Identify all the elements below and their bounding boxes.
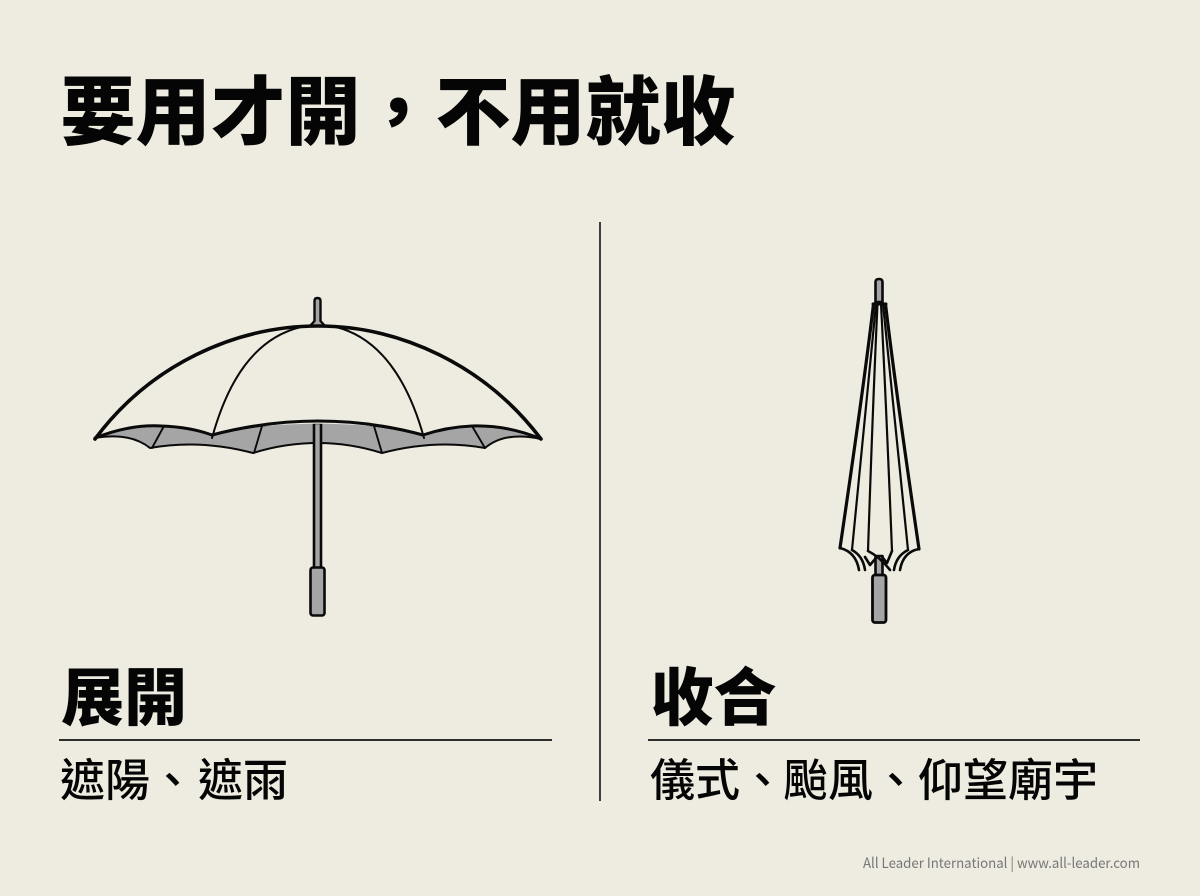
- handle: [310, 568, 324, 616]
- text: closed uses: 颱風、: [783, 755, 918, 806]
- icon: open umbrella: [95, 298, 541, 616]
- umbrella tip: [310, 298, 325, 326]
- heading: closed: 收合: [650, 664, 776, 734]
- umbrella underside: [95, 422, 541, 453]
- title: 要用才開，不用就收: [60, 70, 736, 154]
- icon: closed umbrella: [840, 279, 919, 622]
- outer folds: [840, 304, 919, 549]
- umbrella tip: [876, 279, 882, 302]
- heading: open: 展開: [61, 664, 187, 734]
- text: open uses: 遮雨: [198, 755, 288, 806]
- underside ribs: [152, 426, 485, 453]
- text: closed uses: 儀式、: [650, 755, 785, 806]
- text: closed uses: 仰望廟宇: [918, 755, 1098, 806]
- canopy seams: [212, 327, 424, 438]
- text: open uses: 遮陽、: [60, 755, 195, 806]
- canopy: [95, 326, 541, 439]
- canopy lower edge: [95, 421, 541, 439]
- shaft: [876, 556, 882, 576]
- inner folds: [852, 304, 908, 551]
- scalloped hem: [840, 548, 919, 570]
- canopy outline: [95, 326, 541, 439]
- collar: [873, 302, 886, 306]
- footer credit: All Leader International | www.all-leader.com: [863, 853, 1140, 873]
- handle: [872, 575, 886, 622]
- shaft: [314, 423, 321, 568]
